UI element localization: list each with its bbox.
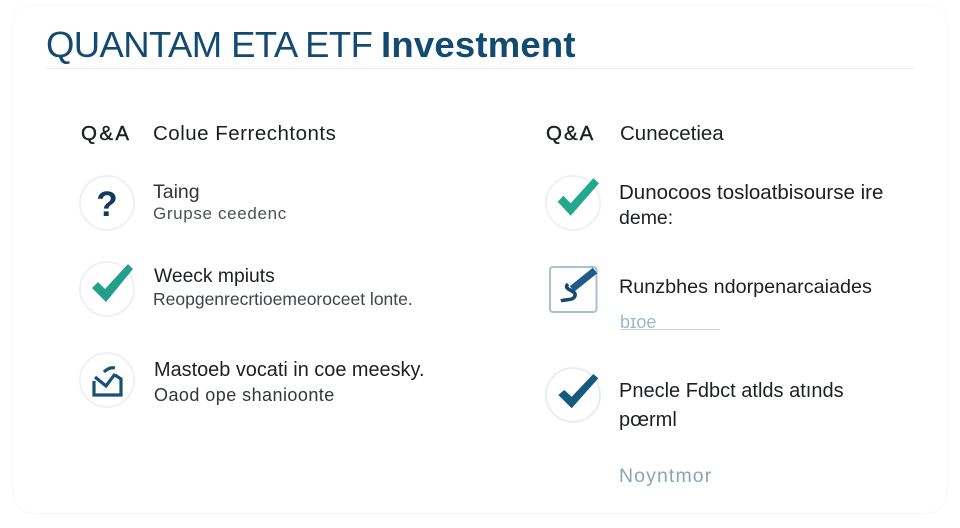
text block: item 3: Mastoeb vocati in coe meesky. xyxy=(154,359,424,381)
heading: left column: Q&A xyxy=(81,122,132,145)
text block: right item 2: Runzbhes ndorpenarcaiades xyxy=(619,276,872,298)
text: Grupse ceedenc xyxy=(153,204,287,223)
text block: item 1: Taing xyxy=(153,181,200,203)
text block: right item 1 xyxy=(619,181,883,229)
text: pœrml xyxy=(619,409,677,431)
heading: right column xyxy=(546,122,724,145)
title: QUANTAM ETA ETF xyxy=(46,24,372,65)
text: Oaod ope shanioonte xyxy=(154,385,335,405)
text block: right item 3: Pnecle Fdbct atlds atınds xyxy=(619,380,844,402)
text: deme: xyxy=(619,207,673,229)
text: Cunecetiea xyxy=(620,122,724,145)
heading: right column: Q&A xyxy=(546,122,595,145)
icon: teal check right xyxy=(545,175,601,231)
text block: item 2 xyxy=(153,266,413,309)
text block: right item 3 xyxy=(619,380,844,431)
icon: navy check xyxy=(545,367,601,423)
text block: item 1 xyxy=(153,181,287,223)
text block: item 2: Weeck mpiuts xyxy=(154,266,275,287)
heading: left column xyxy=(81,122,336,145)
icon: envelope mark xyxy=(79,352,135,408)
icon: question mark: ? xyxy=(96,185,118,224)
text: Reopgenrecrtioemeoroceet lonte. xyxy=(153,289,413,309)
text block: item 3 xyxy=(154,359,424,405)
icon: teal check xyxy=(79,261,135,317)
caption: right item 3: Noyntmor xyxy=(619,465,712,487)
text: Investment xyxy=(381,24,576,65)
text block: right item 1: Dunocoos tosloatbisourse ire xyxy=(619,181,883,204)
icon: question mark xyxy=(79,175,135,231)
icon: checkbox xyxy=(549,266,598,313)
text: Colue Ferrechtonts xyxy=(153,122,336,145)
caption: right item 2: bɪoe xyxy=(620,312,656,332)
title xyxy=(46,24,576,65)
caption: right item 2 xyxy=(620,313,720,330)
